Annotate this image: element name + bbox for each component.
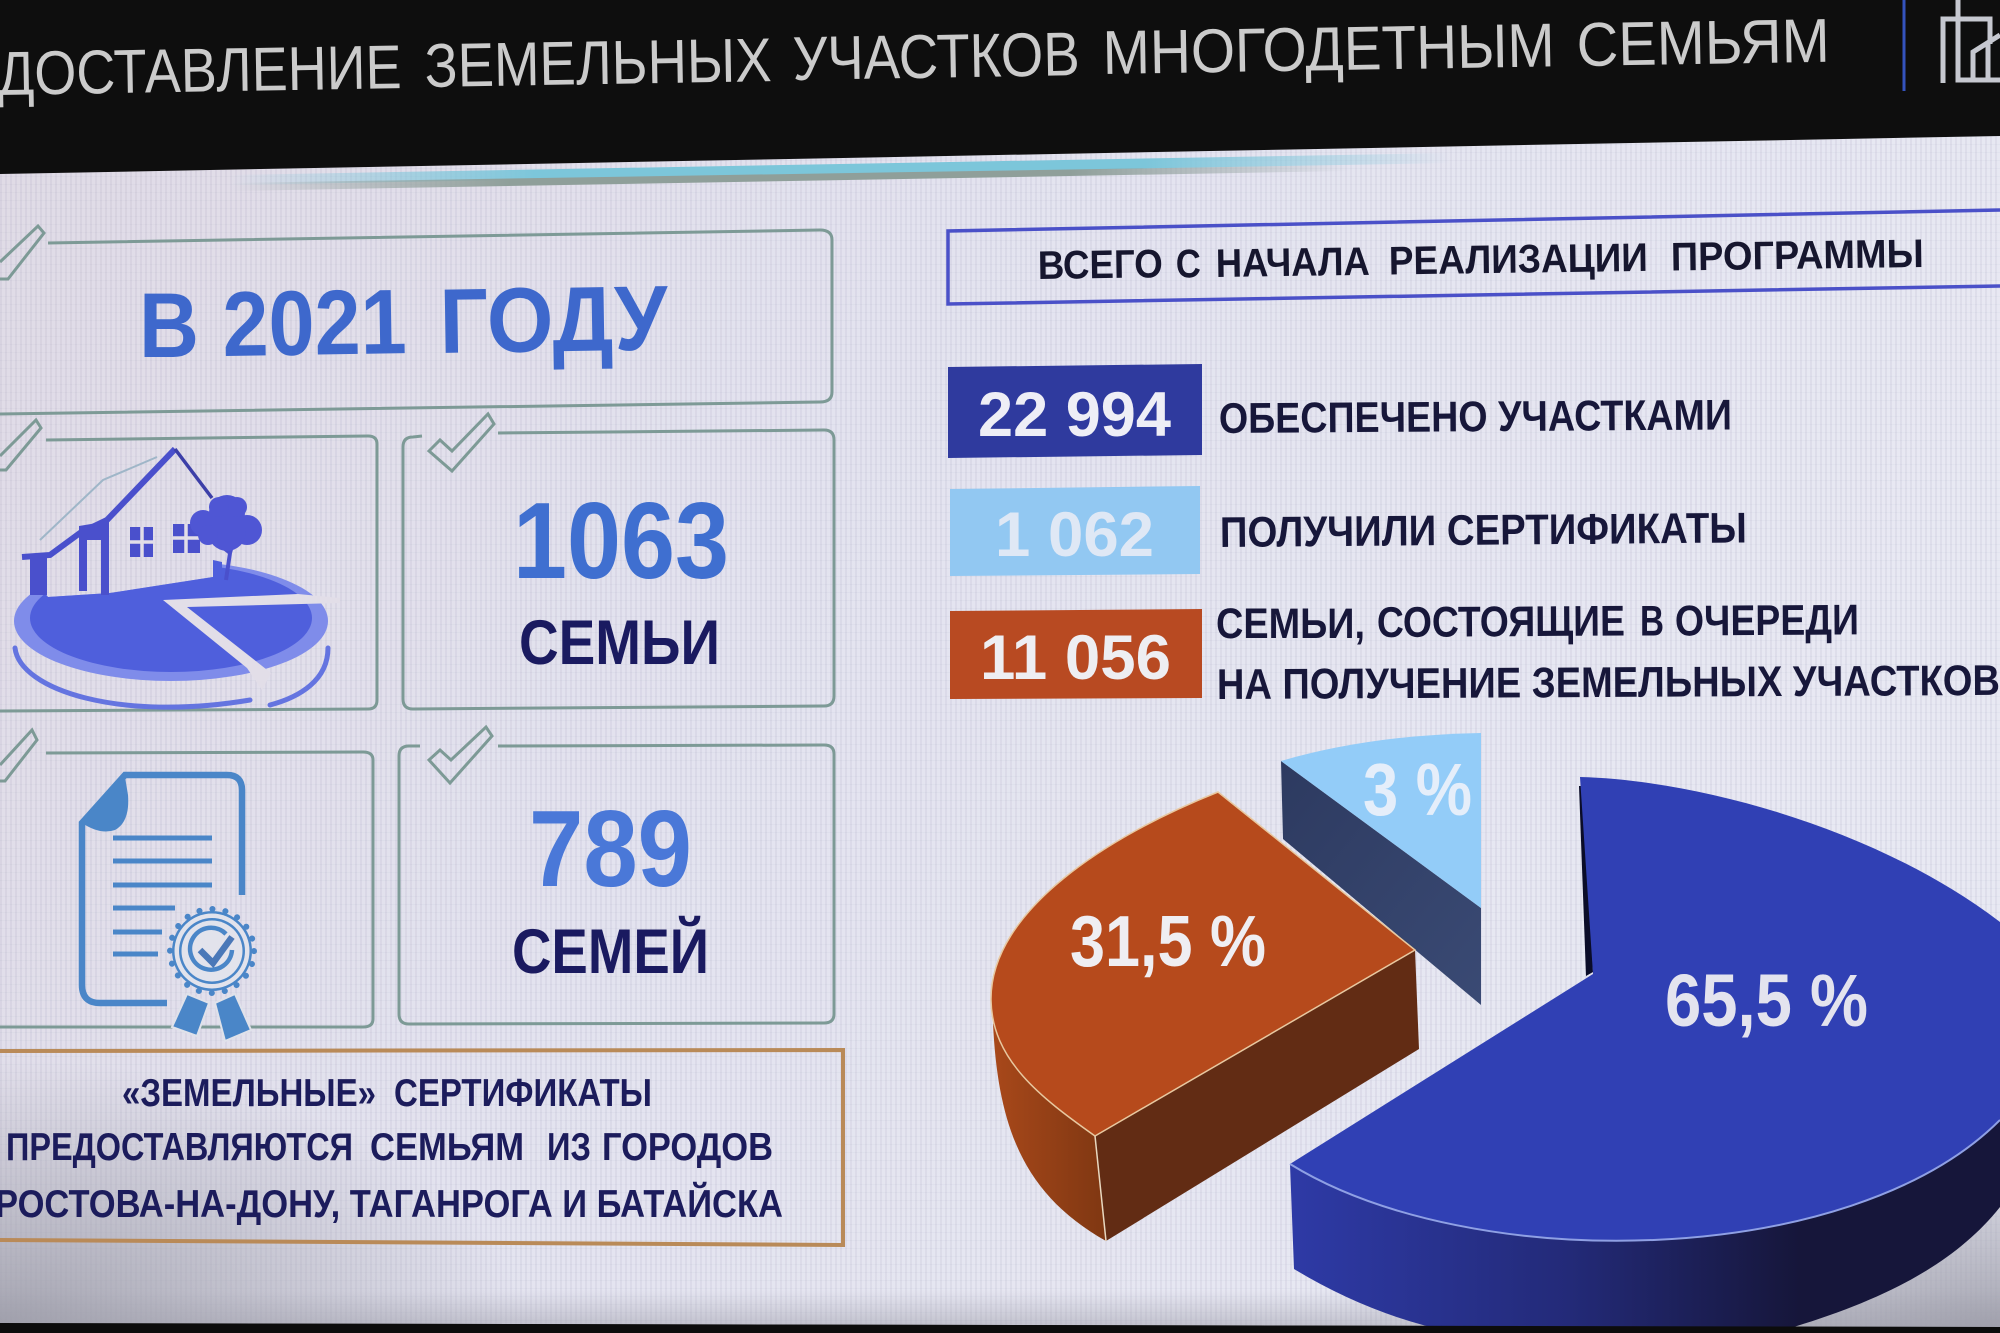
black monitor header [0, 0, 2000, 200]
value: 11 056 [980, 623, 1171, 693]
pie slice: 3 percent [1281, 733, 1481, 1005]
title: УЧАСТКОВ [792, 20, 1080, 94]
pie slice: 65.5 percent [1290, 777, 2000, 1332]
heading: total: РЕАЛИЗАЦИИ [1389, 236, 1648, 283]
note line 1: «ЗЕМЕЛЬНЫЕ» [122, 1072, 376, 1115]
heading: in 2021: ГОДУ [439, 267, 670, 373]
label line 1: СЕМЬИ, [1216, 600, 1365, 648]
panel: 789 families [399, 727, 834, 1024]
legend row: certificates [950, 486, 1747, 576]
heading: total [1038, 232, 1924, 288]
panel: total since programme start [948, 210, 2000, 304]
note line 2: ИЗ [547, 1126, 591, 1169]
number: 1063 [513, 480, 729, 602]
title: ЗЕМЕЛЬНЫХ [424, 26, 772, 101]
label line 1: В [1640, 598, 1664, 646]
icon: check mark [0, 226, 44, 279]
panel: house icon [0, 420, 377, 711]
heading: total: С [1176, 242, 1201, 286]
heading: in 2021 [139, 267, 670, 377]
caption: СЕМЕЙ [512, 916, 709, 987]
icon: logo [1943, 0, 2000, 83]
decorative gradient strip [230, 153, 1450, 185]
icon: check mark [429, 727, 492, 783]
note line 3: РОСТОВА-НА-ДОНУ, ТАГАНРОГА И БАТАЙСКА [0, 1181, 783, 1226]
label line 1 [1216, 596, 1859, 648]
black screen bottom bezel [0, 1323, 2000, 1333]
note line 1 [122, 1072, 652, 1115]
note line 2 [6, 1126, 773, 1169]
value: 22 994 [978, 380, 1171, 450]
note line 2: СЕМЬЯМ [370, 1126, 524, 1169]
label line 1: СОСТОЯЩИЕ [1377, 597, 1625, 647]
pie slice: 31.5 percent: 31,5 % [1070, 902, 1266, 982]
label line 1: ОЧЕРЕДИ [1675, 596, 1859, 645]
title: СЕМЬЯМ [1576, 7, 1830, 80]
heading: total: ВСЕГО [1038, 242, 1163, 288]
pie slice: 3 percent: 3 % [1363, 748, 1472, 831]
caption: СЕМЬИ [519, 608, 720, 678]
icon: check mark [0, 730, 37, 781]
note line 1: СЕРТИФИКАТЫ [394, 1072, 652, 1115]
icon: certificate document [82, 775, 254, 1041]
pie slice: 65.5 percent: 65,5 % [1665, 959, 1868, 1042]
title [0, 7, 1830, 109]
icon: house with land plot [14, 449, 340, 707]
note line 2: ПРЕДОСТАВЛЯЮТСЯ [6, 1126, 353, 1169]
pie slice: 31.5 percent [991, 792, 1419, 1241]
icon: check mark [429, 414, 494, 471]
panel: in 2021 [0, 226, 832, 414]
icon: check mark [0, 420, 41, 470]
label: ПОЛУЧИЛИ СЕРТИФИКАТЫ [1220, 504, 1747, 557]
heading: total: ПРОГРАММЫ [1671, 232, 1924, 279]
heading: total: НАЧАЛА [1216, 240, 1370, 286]
panel: certificate icon [0, 730, 373, 1041]
title: ДОСТАВЛЕНИЕ [0, 33, 402, 109]
title: МНОГОДЕТНЫМ [1102, 11, 1555, 88]
legend row: provided [948, 364, 1732, 458]
legend row: queue [950, 596, 2000, 709]
heading: in 2021: В [139, 275, 199, 377]
label: ОБЕСПЕЧЕНО УЧАСТКАМИ [1219, 391, 1732, 443]
number: 789 [529, 788, 692, 910]
callout: certificates note [0, 1050, 843, 1245]
note line 2: ГОРОДОВ [602, 1126, 773, 1169]
header divider [1902, 0, 1906, 91]
panel: 1063 families [403, 414, 834, 709]
3D pie chart [991, 733, 2000, 1332]
heading: in 2021: 2021 [222, 271, 407, 376]
value: 1 062 [995, 500, 1154, 570]
